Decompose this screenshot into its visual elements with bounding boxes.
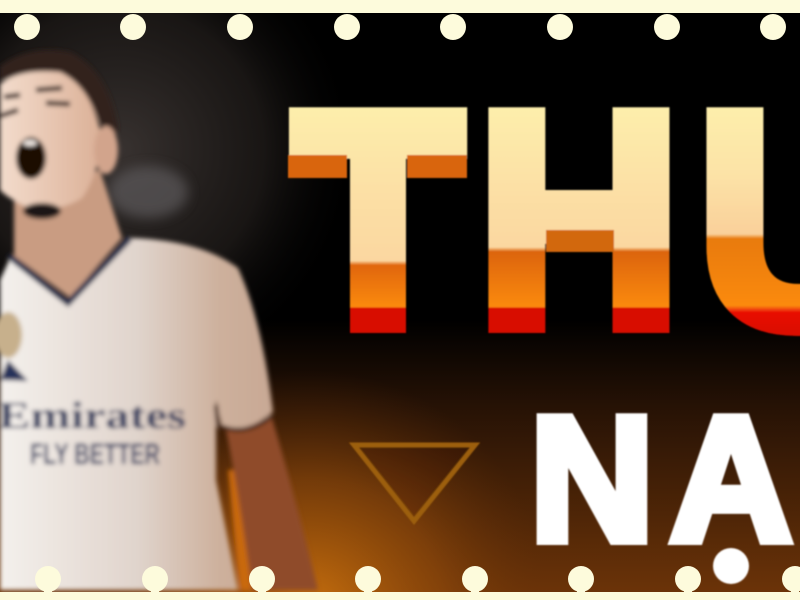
sleeve hem: [216, 405, 272, 430]
player collar: [9, 238, 130, 303]
heading: THU: T: [294, 51, 462, 388]
heading: THU: H: [478, 51, 680, 388]
player eyes and brows: [0, 88, 70, 116]
player arm: [226, 418, 318, 590]
heading: NA: N: [530, 380, 654, 578]
shirt logo: [0, 360, 28, 381]
player photo: [0, 50, 318, 590]
player teeth: [23, 140, 37, 146]
icon: down triangle: [354, 445, 475, 521]
heading shading: [288, 155, 614, 252]
player face: [0, 71, 100, 209]
player hair: [0, 50, 118, 145]
bottom ticket border with dots: [0, 566, 800, 600]
player ear: [94, 126, 118, 174]
sponsor name: Emirates: [0, 395, 186, 437]
player mouth: [16, 137, 46, 179]
sponsor slogan: FLY BETTER: [30, 438, 160, 471]
white dot: [713, 548, 749, 584]
player neck: [14, 170, 122, 298]
top ticket border with dots: [0, 0, 800, 40]
player shirt: [0, 238, 273, 590]
heading: THU: [288, 51, 800, 388]
heading: NA: A: [670, 380, 792, 578]
heading: NA: [530, 380, 792, 578]
player beard: [23, 203, 61, 219]
orange rim light: [228, 470, 256, 590]
shirt crest: [0, 312, 22, 358]
